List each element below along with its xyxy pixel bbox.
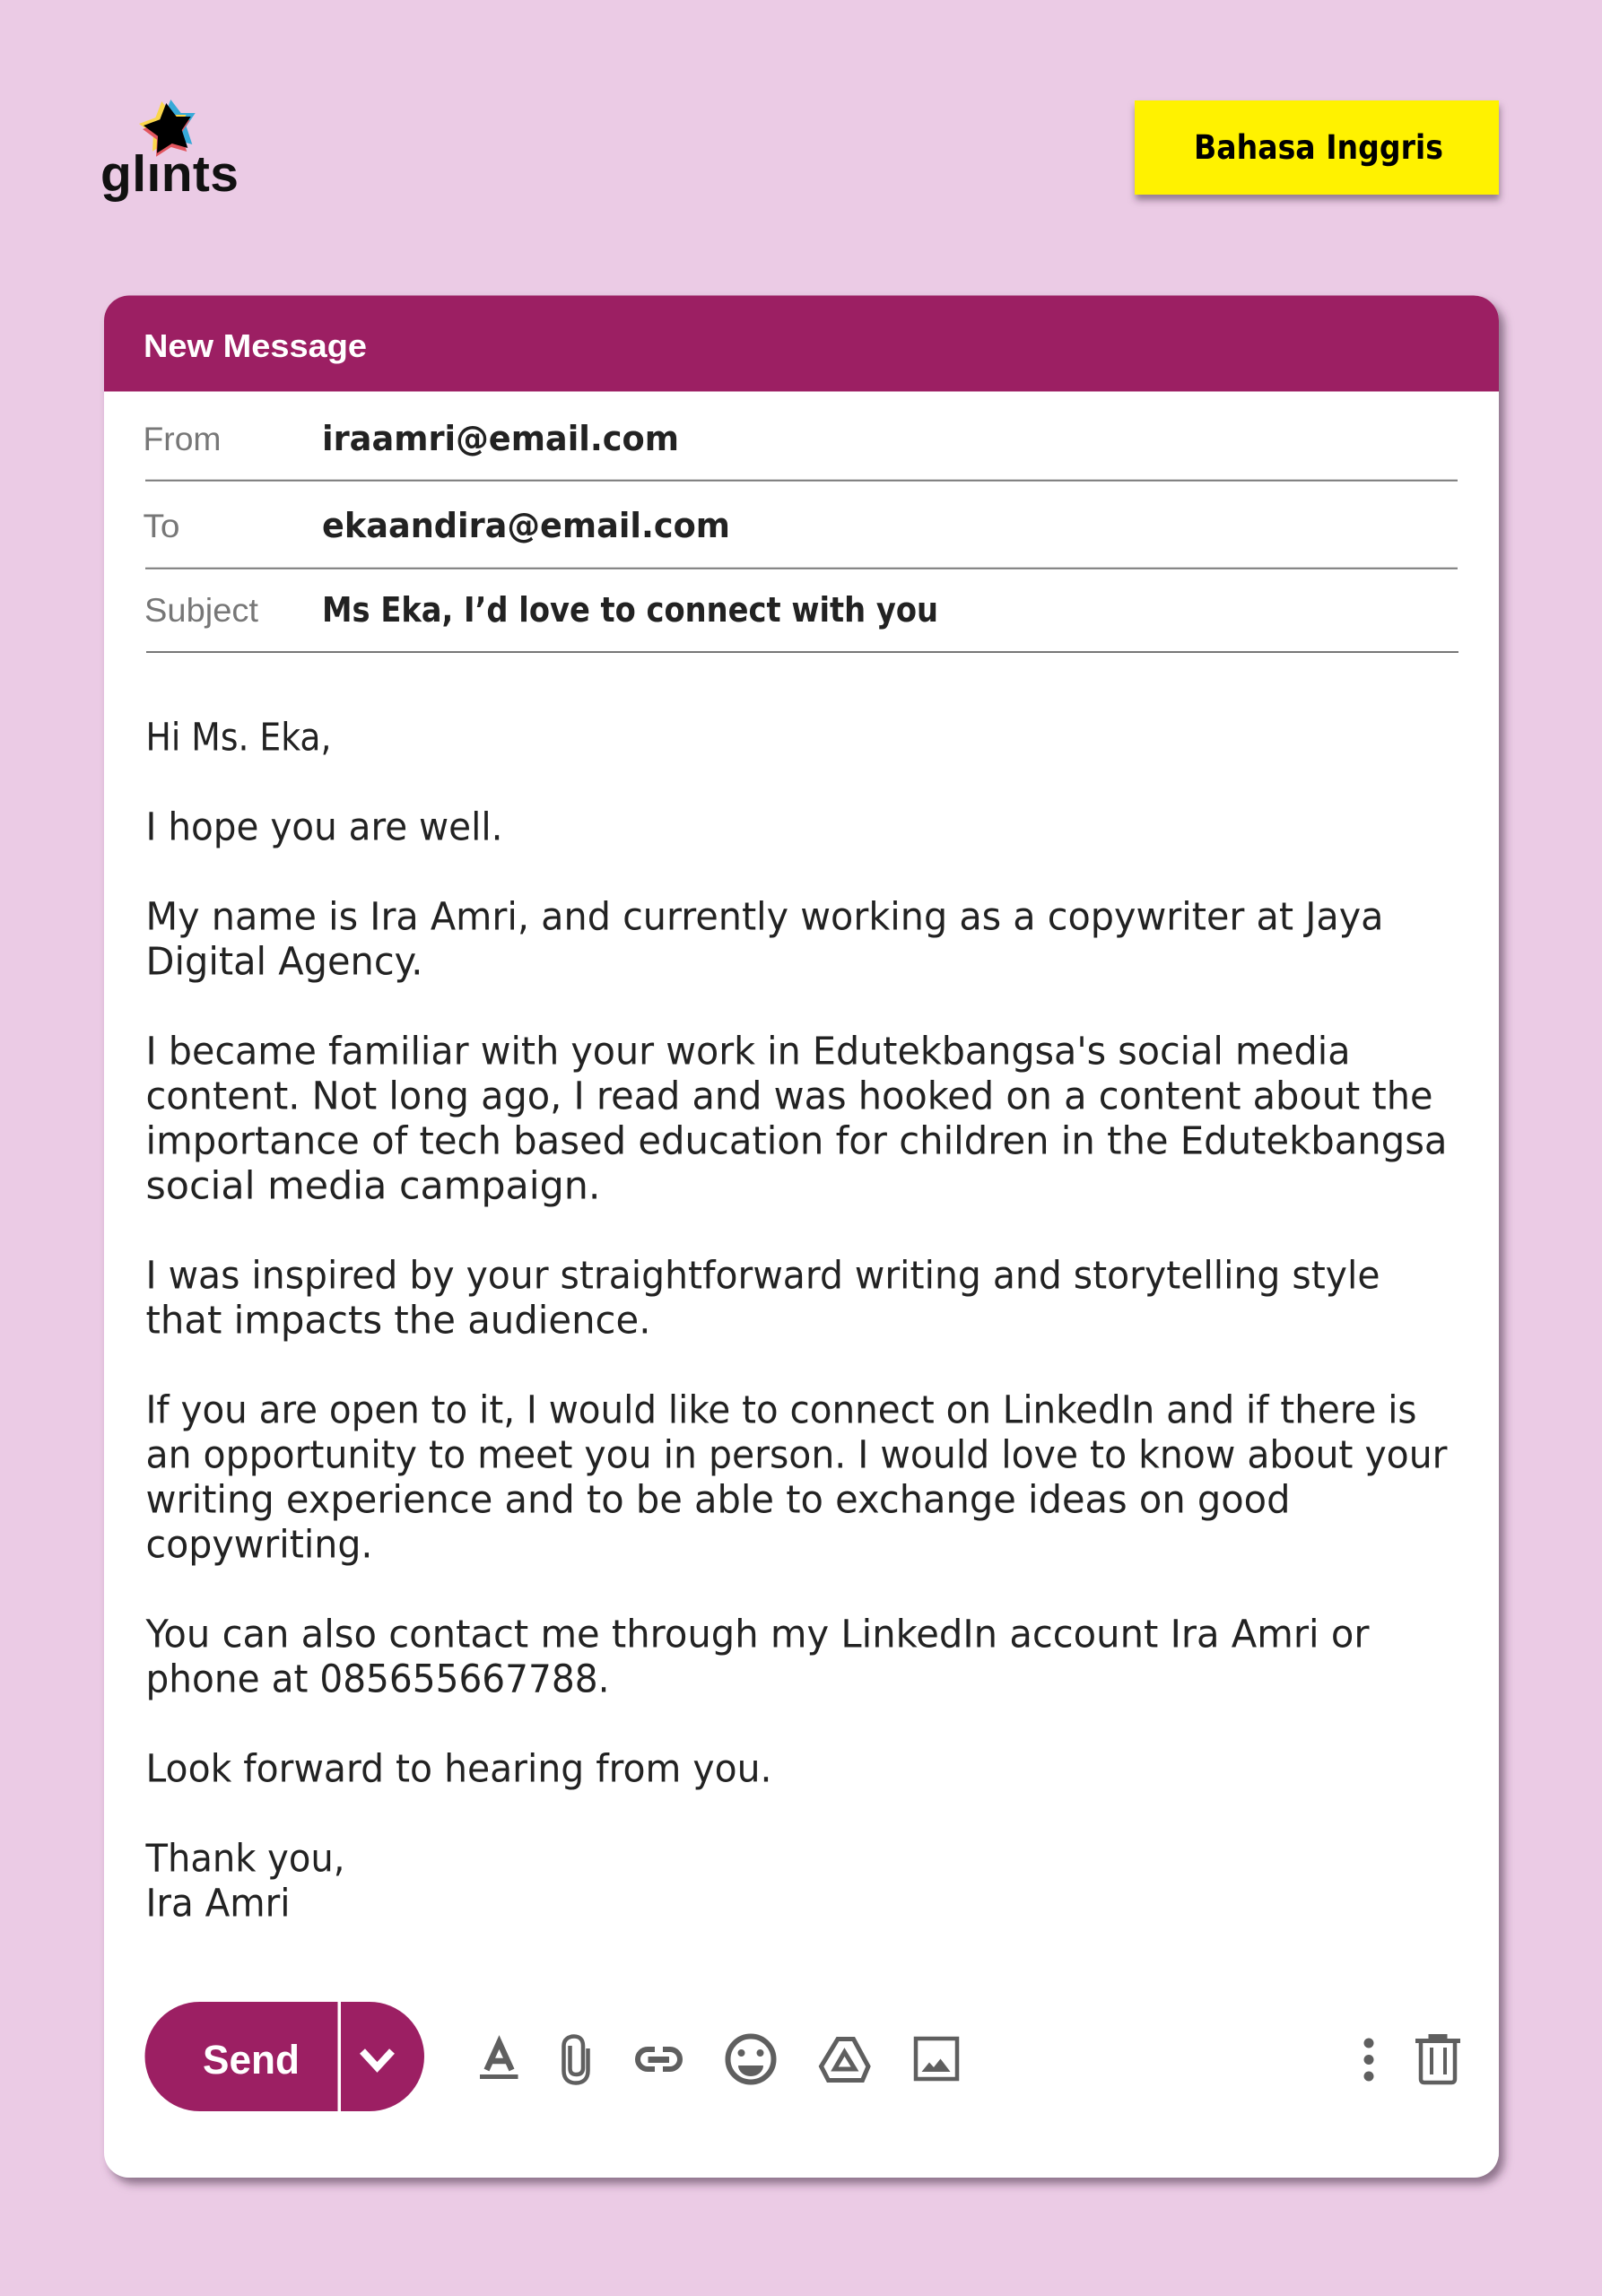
email body text: If you are open to it, I would like to connect on LinkedIn and if there is [145, 1388, 1417, 1433]
field: from [144, 419, 679, 458]
field: subject: Ms Eka, I’d love to connect with you [322, 590, 938, 630]
field: to [144, 506, 730, 545]
icon: trash [1415, 2034, 1460, 2083]
email body text: social media campaign. [145, 1164, 601, 1209]
email body text: that impacts the audience. [145, 1299, 651, 1344]
field: to: ekaandira@email.com [322, 506, 730, 545]
email body text: I was inspired by your straightforward writing and storytelling style [145, 1254, 1380, 1299]
logo star [139, 100, 196, 157]
email body text: an opportunity to meet you in person. I would love to know about your [145, 1433, 1448, 1478]
email body text: writing experience and to be able to exchange ideas on good [145, 1478, 1290, 1523]
header title: New Message [144, 327, 367, 364]
email body text: You can also contact me through my LinkedIn account Ira Amri or [145, 1613, 1370, 1657]
email body text [145, 716, 1448, 1926]
email body text: Hi Ms. Eka, [145, 716, 332, 761]
icon: text format [480, 2042, 518, 2079]
icon: more options [1363, 2038, 1374, 2081]
icon: link [638, 2049, 680, 2069]
icon: image [916, 2039, 957, 2079]
field: from: From [144, 421, 221, 457]
email body text: copywriting. [145, 1523, 373, 1568]
email body text: My name is Ira Amri, and currently working as a copywriter at Jaya [145, 895, 1383, 940]
icon: emoji [728, 2036, 773, 2083]
panel: email card [104, 296, 1499, 2178]
language badge [1135, 100, 1499, 195]
logo: glints [100, 100, 239, 203]
email body text: I hope you are well. [145, 805, 502, 850]
email body text: importance of tech based education for children in the Edutekbangsa [145, 1119, 1448, 1164]
email body text: Ira Amri [145, 1882, 291, 1926]
card header bar [104, 296, 1499, 391]
field: from: iraamri@email.com [322, 419, 679, 458]
field: subject: Subject [144, 592, 259, 629]
email body text: I became familiar with your work in Edutekbangsa's social media [145, 1030, 1351, 1074]
logo wordmark: glints [100, 145, 239, 203]
email body text: content. Not long ago, I read and was hooked on a content about the [145, 1074, 1433, 1119]
send label: Send [203, 2037, 300, 2083]
email body text: Thank you, [145, 1837, 344, 1882]
email body text: Digital Agency. [145, 940, 423, 985]
send button [145, 2002, 424, 2111]
icon: chevron [362, 2051, 392, 2067]
field: to: To [144, 508, 179, 544]
icon: paperclip [563, 2036, 588, 2083]
badge text: Bahasa Inggris [1194, 128, 1443, 167]
icon: drive [822, 2039, 868, 2081]
email body text: Look forward to hearing from you. [145, 1747, 771, 1792]
email body text: phone at 085655667788. [145, 1657, 610, 1702]
